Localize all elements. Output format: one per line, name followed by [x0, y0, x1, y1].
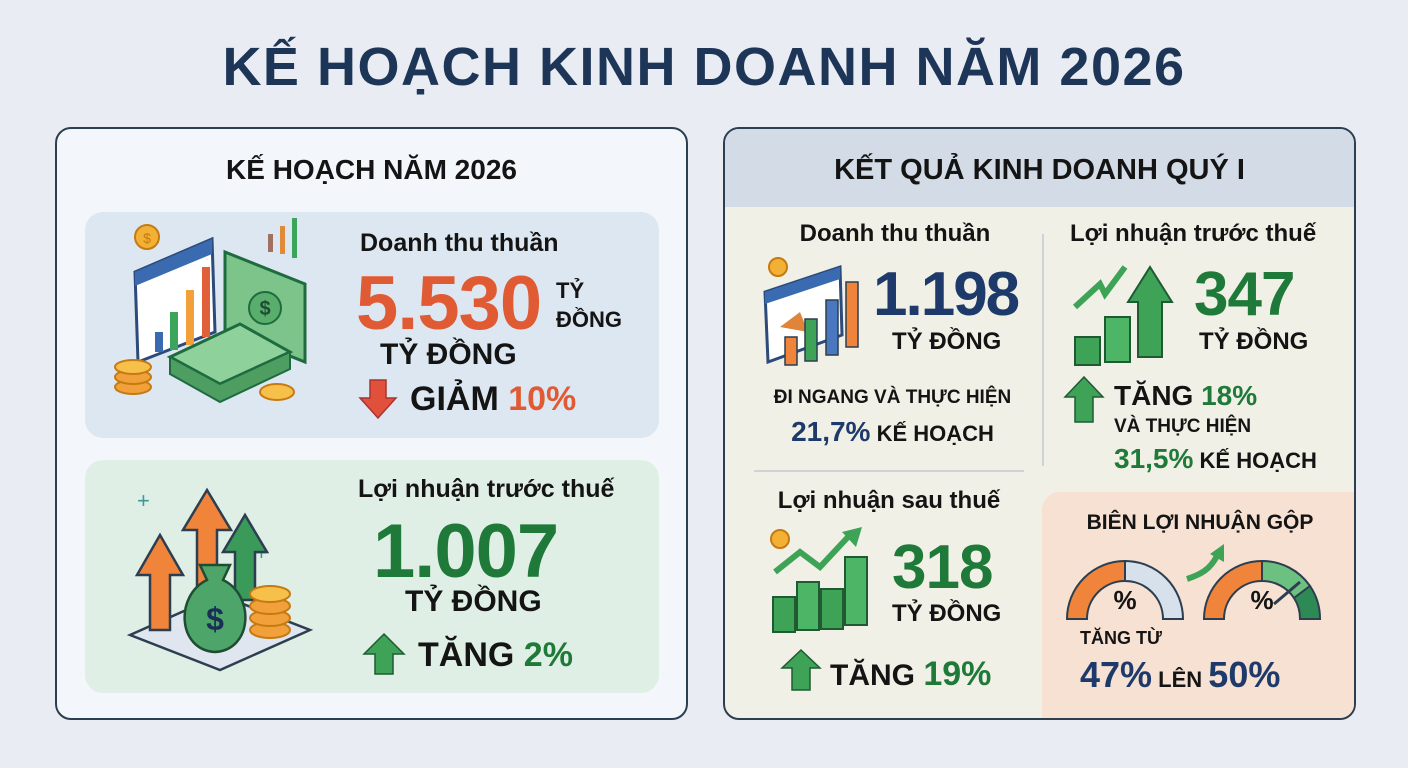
icon: dashboard with money [114, 218, 306, 404]
icon: gauges: % [1250, 585, 1274, 615]
icon: up arrow [780, 649, 822, 691]
value: 5.530: 5.530 [356, 261, 541, 346]
icon: dashboard with money: $ [259, 298, 271, 320]
panel heading: Q1: KẾT QUẢ KINH DOANH QUÝ I [834, 154, 1245, 186]
panel: Q1 results [723, 127, 1356, 720]
card: profit plan [85, 460, 659, 693]
icon: dashboard with money: $ [143, 230, 151, 246]
panel: plan 2026 [55, 127, 688, 720]
icon: down arrow [358, 379, 398, 419]
label: Lợi nhuận trước thuế [1070, 220, 1316, 247]
value: 318: 318 [892, 533, 992, 602]
note value: 21,7% KẾ HOẠCH [791, 416, 994, 447]
title: KẾ HOẠCH KINH DOANH NĂM 2026 [222, 37, 1186, 97]
block: Q1 revenue [763, 220, 1018, 447]
label: revenue: Doanh thu thuần [360, 229, 559, 257]
icon: dashboard chart [763, 257, 859, 366]
icon: green bars and arrows [1073, 265, 1174, 366]
unit small [556, 278, 622, 332]
card: revenue plan [85, 212, 659, 438]
unit small: ĐỒNG [556, 307, 622, 332]
change text: TĂNG 19% [830, 655, 991, 693]
block: Q1 profit before tax [1063, 220, 1317, 474]
icon: gauges: % [1113, 585, 1137, 615]
change text: TĂNG 18% [1114, 380, 1257, 411]
unit: TỶ ĐỒNG [380, 338, 517, 371]
icon: money bag with arrows: $ [206, 601, 224, 637]
block: Q1 profit after tax [770, 487, 1001, 693]
label: BIÊN LỢI NHUẬN GỘP [1087, 511, 1313, 534]
icon: money bag with arrows: + [137, 488, 150, 513]
text: 47% to 50%: 47% LÊN 50% [1080, 654, 1280, 695]
icon: money bag with arrows: + [255, 540, 268, 565]
note: ĐI NGANG VÀ THỰC HIỆN [774, 387, 1011, 408]
icon: money bag with arrows [126, 488, 314, 672]
unit: TỶ ĐỒNG [892, 600, 1001, 627]
label: Doanh thu thuần [800, 220, 990, 247]
change: down 10%: GIẢM 10% [410, 380, 576, 418]
label: profit before tax: Lợi nhuận trước thuế [358, 475, 614, 503]
icon: gauges [1066, 544, 1321, 620]
label: Lợi nhuận sau thuế [778, 487, 1000, 514]
unit: TỶ ĐỒNG [405, 585, 542, 618]
icon: chart with arrow [770, 527, 868, 633]
value: 1.007: 1.007 [373, 509, 558, 594]
block: Q1 profit before tax: 31,5% KẾ HOẠCH [1114, 443, 1317, 474]
change: up 2% [362, 633, 573, 675]
value: 1.198: 1.198 [873, 260, 1018, 329]
block: Q1 profit before tax: VÀ THỰC HIỆN [1114, 416, 1251, 437]
panel heading: plan: KẾ HOẠCH NĂM 2026 [226, 154, 517, 185]
card: gross margin [1042, 492, 1358, 722]
unit small: TỶ [556, 278, 584, 303]
icon: up arrow [362, 633, 406, 675]
unit: TỶ ĐỒNG [892, 328, 1001, 355]
value: 347: 347 [1194, 260, 1294, 329]
change: up 2%: TĂNG 2% [418, 636, 573, 674]
icon: up arrow [1063, 376, 1105, 423]
unit: TỶ ĐỒNG [1199, 328, 1308, 355]
header strip [725, 129, 1354, 207]
text: increase from: TĂNG TỪ [1080, 628, 1162, 648]
